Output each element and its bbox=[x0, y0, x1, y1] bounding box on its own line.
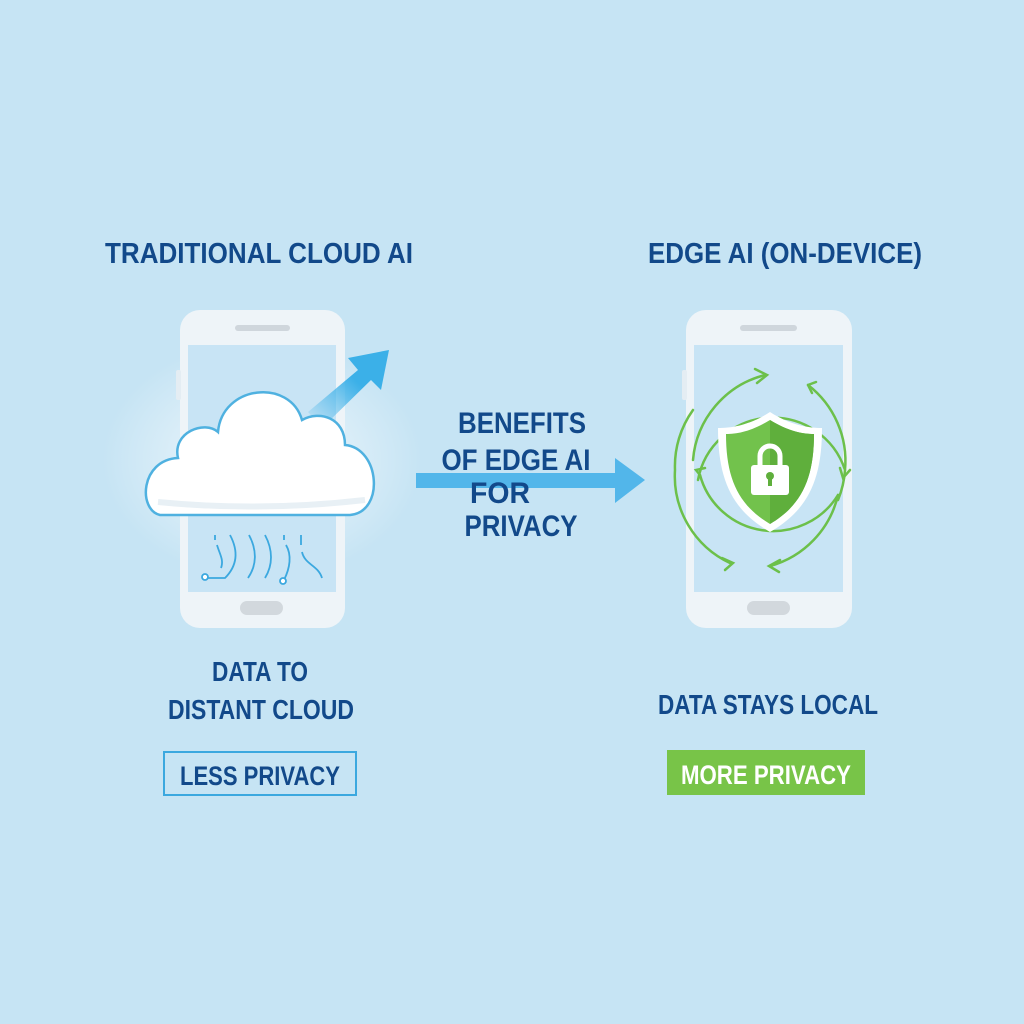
center arrow and label: OF EDGE AI bbox=[442, 444, 590, 477]
center arrow and label bbox=[416, 407, 645, 543]
icon: cloud bbox=[146, 392, 374, 515]
caption: data to distant cloud: DATA TO bbox=[212, 656, 308, 687]
badge: more privacy bbox=[667, 750, 865, 795]
caption: data stays local: DATA STAYS LOCAL bbox=[658, 689, 878, 720]
data lines bbox=[202, 535, 322, 584]
left phone with cloud bbox=[102, 310, 422, 628]
badge: less privacy: LESS PRIVACY bbox=[180, 761, 340, 791]
icon: circular arrows bbox=[675, 369, 850, 572]
center arrow and label: PRIVACY bbox=[464, 510, 578, 543]
caption: data to distant cloud bbox=[168, 656, 354, 725]
icon: shield with lock bbox=[718, 412, 822, 532]
badge: more privacy: MORE PRIVACY bbox=[681, 760, 851, 790]
icon: upload arrow bbox=[308, 350, 389, 428]
caption: data to distant cloud: DISTANT CLOUD bbox=[168, 694, 354, 725]
center arrow and label: BENEFITS bbox=[458, 407, 586, 440]
title: edge AI: EDGE AI (ON-DEVICE) bbox=[648, 238, 922, 270]
title: traditional cloud AI: TRADITIONAL CLOUD AI bbox=[105, 238, 413, 270]
center arrow and label: FOR bbox=[470, 477, 530, 510]
badge: less privacy bbox=[164, 752, 356, 795]
right phone with shield bbox=[675, 310, 852, 628]
